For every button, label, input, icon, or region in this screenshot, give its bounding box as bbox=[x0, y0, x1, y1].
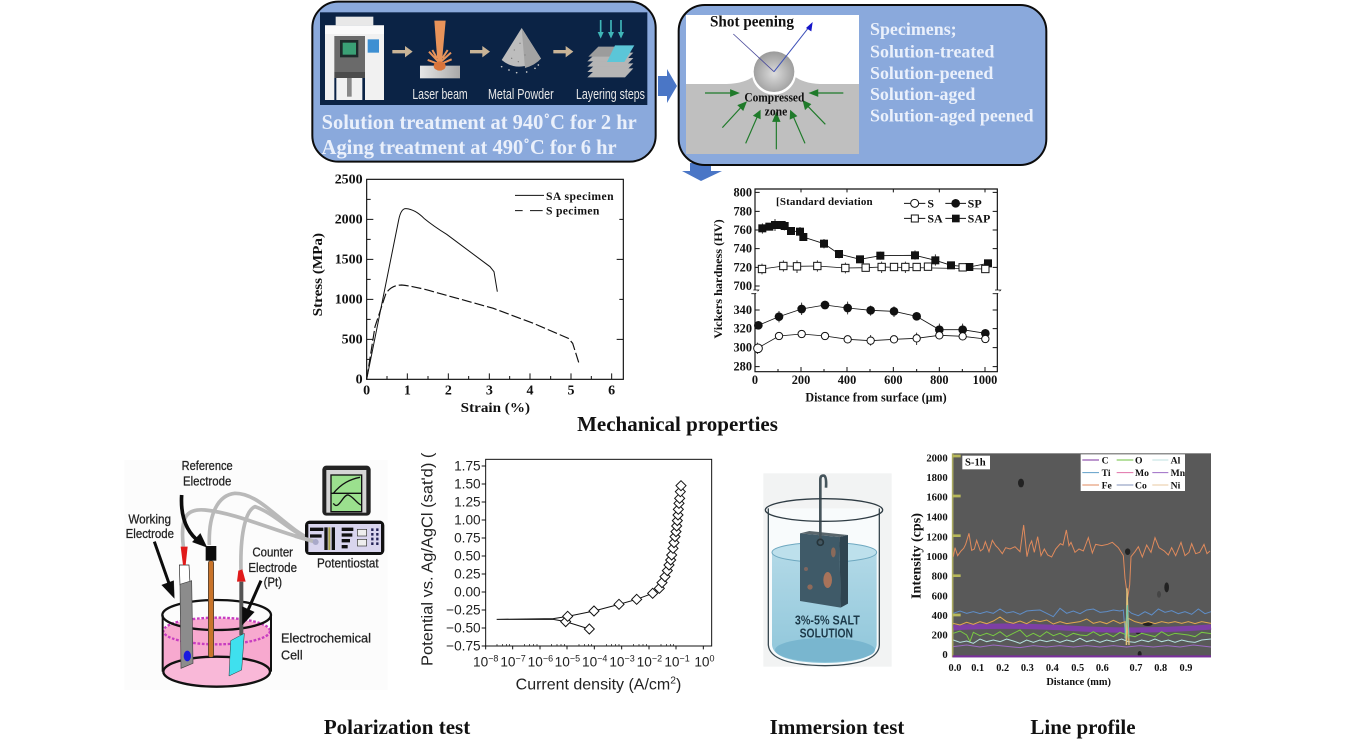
polarization data bbox=[497, 481, 686, 634]
y tick labels: −0.25 bbox=[446, 602, 481, 617]
x tick labels: −3 bbox=[625, 653, 635, 663]
label: metal powder: Metal Powder bbox=[488, 87, 554, 103]
x tick labels: −1 bbox=[680, 653, 690, 663]
arrow: peening to mechanical properties bbox=[682, 163, 722, 181]
y tick labels: −0.50 bbox=[446, 620, 481, 635]
x tick labels: −4 bbox=[597, 653, 607, 663]
x tick labels: 0.2 bbox=[996, 663, 1009, 674]
axis tick labels: 2 bbox=[445, 384, 452, 399]
text: aging treatment: Aging treatment at 490˚C for 6 hr bbox=[322, 137, 617, 159]
axis tick labels: 500 bbox=[342, 332, 363, 347]
y tick labels: 1800 bbox=[926, 473, 948, 484]
labels: Electrode bbox=[183, 473, 231, 488]
y tick labels: 0.25 bbox=[454, 566, 481, 581]
x tick labels: 0.9 bbox=[1180, 663, 1192, 674]
y tick labels: 0.00 bbox=[454, 584, 481, 599]
x tick labels: 10 bbox=[694, 654, 710, 669]
legend: S pecimen bbox=[546, 205, 600, 218]
note: standard deviation: [Standard deviation bbox=[776, 196, 873, 208]
trace: C baseline bbox=[953, 653, 1211, 659]
y tick labels bbox=[926, 453, 948, 661]
text: specimen list: Solution-peened bbox=[870, 63, 993, 83]
axis tick labels: 300 bbox=[733, 341, 752, 355]
pointer arrows bbox=[154, 495, 261, 625]
heading: immersion test: Immersion test bbox=[770, 715, 904, 739]
legend: Fe bbox=[1102, 480, 1113, 491]
text: specimen list: Solution-treated bbox=[870, 41, 994, 61]
icon: process arrows bbox=[392, 46, 573, 57]
label: salt solution: SOLUTION bbox=[800, 627, 853, 641]
legend: SAP bbox=[968, 211, 990, 225]
labels: Electrode bbox=[248, 560, 297, 575]
axis tick labels: 1 bbox=[404, 384, 411, 399]
axis title: hardness: Vickers hardness (HV) bbox=[711, 219, 725, 339]
labels: Counter bbox=[252, 545, 293, 560]
text: specimen list: Solution-aged bbox=[870, 84, 975, 104]
reference electrode bbox=[206, 546, 216, 657]
y tick labels: 1.00 bbox=[454, 512, 481, 527]
text: specimen list: Specimens; bbox=[870, 19, 957, 39]
working electrode bbox=[179, 547, 193, 668]
x tick labels bbox=[473, 653, 715, 669]
axis tick labels: 800 bbox=[930, 373, 949, 387]
x tick labels: 10 bbox=[555, 654, 570, 669]
x tick labels: 10 bbox=[582, 654, 597, 669]
diagram: electrochemical cell bbox=[124, 458, 388, 690]
legend bbox=[904, 196, 990, 225]
axis tick labels: 720 bbox=[733, 260, 752, 274]
axis tick labels bbox=[335, 172, 615, 399]
y tick labels: 1.25 bbox=[454, 494, 481, 509]
legend: Ni bbox=[1171, 480, 1181, 491]
chart: polarization curve bbox=[419, 452, 715, 693]
heading: mechanical properties: Mechanical properties bbox=[577, 412, 778, 436]
labels: Cell bbox=[281, 647, 303, 662]
arrow: process to peening bbox=[658, 69, 677, 103]
legend: SA bbox=[927, 211, 943, 225]
axis tick labels: 1500 bbox=[335, 252, 363, 267]
axis tick labels: 280 bbox=[733, 360, 752, 374]
trace: Fe bbox=[953, 525, 1210, 598]
x tick labels: 0.3 bbox=[1021, 663, 1034, 674]
axis tick labels: 6 bbox=[608, 384, 615, 399]
y axis overlay bbox=[950, 453, 955, 657]
x tick labels: 0.5 bbox=[1071, 663, 1084, 674]
chart: line profile bbox=[909, 453, 1211, 688]
x tick labels: 0.8 bbox=[1154, 663, 1167, 674]
beaker rim bbox=[765, 499, 883, 521]
axis tick labels: 1000 bbox=[335, 292, 363, 307]
labels: Electrode bbox=[126, 526, 174, 541]
heading: shot peening: Shot peening bbox=[710, 14, 794, 31]
series: S bbox=[754, 330, 989, 354]
axis tick labels bbox=[733, 185, 997, 387]
legend: O bbox=[1135, 455, 1143, 466]
x tick labels: −7 bbox=[516, 653, 526, 663]
y tick labels: 1400 bbox=[926, 513, 948, 524]
y tick labels: 1000 bbox=[926, 552, 948, 563]
y tick labels: 800 bbox=[932, 572, 948, 583]
diagram: shot peening: zone bbox=[765, 105, 788, 119]
axis title: potential: Potential vs. Ag/AgCl (sat'd) ( bbox=[419, 452, 436, 666]
micrograph specks bbox=[1018, 479, 1169, 657]
axis title: distance: Distance (mm) bbox=[1046, 676, 1111, 688]
axis tick labels: 2000 bbox=[335, 212, 363, 227]
diagram: immersion beaker bbox=[763, 473, 892, 667]
metal specimen bbox=[800, 531, 848, 608]
axis title: current density: Current density (A/cm bbox=[516, 676, 670, 693]
y tick labels: 0.75 bbox=[454, 530, 481, 545]
label: layering steps: Layering steps bbox=[576, 87, 645, 103]
counter electrode bbox=[229, 569, 246, 676]
icon: layering steps bbox=[587, 20, 634, 77]
axis tick labels: 3 bbox=[486, 384, 493, 399]
panel: additive manufacturing and heat treatment bbox=[312, 2, 656, 162]
y tick labels: 0 bbox=[942, 650, 948, 661]
axis tick labels: 0 bbox=[752, 373, 758, 387]
text: specimen list bbox=[870, 19, 1034, 126]
trace: Mn band bbox=[953, 626, 1211, 630]
y tick labels: 200 bbox=[932, 631, 948, 642]
x tick labels: 0.6 bbox=[1096, 663, 1109, 674]
series: SA bbox=[758, 260, 989, 274]
axis title: distance: Distance from surface (μm) bbox=[805, 391, 947, 405]
wires bbox=[183, 493, 315, 570]
axis tick labels: 200 bbox=[792, 373, 810, 387]
series: SP bbox=[754, 301, 990, 338]
curve: S specimen bbox=[367, 285, 579, 379]
sample tag bbox=[962, 456, 990, 469]
legend: Ti bbox=[1102, 468, 1111, 479]
diagram: shot peening bbox=[686, 14, 859, 154]
labels: Potentiostat bbox=[317, 555, 379, 570]
image: manufacturing process strip bbox=[320, 12, 647, 105]
series: SAP bbox=[758, 219, 992, 271]
axis tick labels: 800 bbox=[733, 185, 752, 199]
heading: polarization test: Polarization test bbox=[324, 715, 470, 739]
axis title: intensity: Intensity (cps) bbox=[909, 513, 924, 599]
x tick labels: −2 bbox=[652, 653, 662, 663]
axis tick labels: 760 bbox=[733, 223, 752, 237]
axis tick labels: 600 bbox=[884, 373, 903, 387]
labels: Reference bbox=[182, 458, 233, 473]
axis tick labels: 340 bbox=[733, 303, 752, 317]
legend: C bbox=[1102, 455, 1109, 466]
axis title: current density: 2 bbox=[670, 676, 676, 687]
axis title: strain: Strain (%) bbox=[461, 401, 530, 416]
axis tick labels: 0 bbox=[356, 372, 363, 387]
hook bbox=[820, 476, 826, 543]
text: solution treatment: Solution treatment at 940˚C for 2 hr bbox=[322, 112, 637, 134]
x tick labels: 0.4 bbox=[1046, 663, 1059, 674]
icon: metal powder cone bbox=[501, 28, 541, 73]
trace: Ti bbox=[953, 608, 1211, 640]
y tick labels: 0.50 bbox=[454, 548, 481, 563]
labels bbox=[126, 458, 379, 662]
legend: Co bbox=[1135, 480, 1147, 491]
x tick labels: 10 bbox=[500, 654, 516, 669]
y tick labels: 600 bbox=[932, 591, 948, 602]
labels: (Pt) bbox=[264, 575, 282, 590]
legend: SA specimen bbox=[546, 190, 614, 203]
icon: 3D printer machine bbox=[325, 17, 384, 100]
chart: line profile: S-1h bbox=[965, 458, 986, 469]
legend bbox=[515, 190, 614, 218]
legend: Al bbox=[1171, 455, 1181, 466]
label: laser beam: Laser beam bbox=[412, 87, 468, 103]
axis tick labels: 320 bbox=[733, 322, 752, 336]
x tick labels: −8 bbox=[488, 653, 498, 663]
trace: O green bbox=[953, 630, 1211, 642]
x tick labels: 0.1 bbox=[971, 663, 984, 674]
x tick labels: −6 bbox=[543, 653, 553, 663]
x tick labels bbox=[949, 663, 1192, 674]
x tick labels: 0.0 bbox=[949, 663, 961, 674]
legend: S bbox=[927, 196, 934, 210]
axis tick labels: 1000 bbox=[973, 373, 997, 387]
x tick labels: 10 bbox=[528, 654, 543, 669]
axis tick labels: 780 bbox=[733, 204, 752, 218]
y tick labels: 400 bbox=[932, 611, 948, 622]
beaker body bbox=[768, 508, 879, 666]
label: compressed zone: Compressed bbox=[744, 90, 804, 104]
panel: shot peening and specimens bbox=[679, 5, 1046, 165]
icon: laser beam bbox=[420, 21, 460, 78]
chart: stress-strain curves bbox=[311, 172, 623, 416]
salt water bbox=[772, 542, 877, 663]
axis title: stress: Stress (MPa) bbox=[311, 233, 326, 316]
y tick labels: 1.50 bbox=[454, 476, 481, 491]
label: salt solution: 3%-5% SALT bbox=[795, 613, 860, 627]
axis tick labels: 5 bbox=[567, 384, 574, 399]
spike overlays bbox=[1126, 588, 1129, 645]
text: specimen list: Solution-aged peened bbox=[870, 106, 1034, 126]
x tick labels: 0 bbox=[710, 653, 715, 663]
y tick labels: 2000 bbox=[926, 453, 948, 464]
y tick labels: 1200 bbox=[926, 532, 948, 543]
trace: Co purple bbox=[953, 645, 1211, 648]
y tick labels: 1.75 bbox=[454, 458, 481, 473]
axis tick labels: 700 bbox=[733, 279, 752, 293]
y tick labels: 1600 bbox=[926, 493, 948, 504]
axis tick labels: 4 bbox=[526, 384, 533, 399]
axis title: current density: ) bbox=[676, 676, 681, 693]
legend bbox=[1081, 454, 1186, 491]
y tick labels: −0.75 bbox=[446, 638, 481, 653]
x tick labels: 10 bbox=[609, 654, 625, 669]
labels: Electrochemical bbox=[281, 631, 371, 646]
x tick labels: 10 bbox=[473, 654, 488, 669]
trace: Al pale bbox=[953, 638, 1211, 643]
potentiostat bbox=[295, 466, 384, 555]
trace: Ni orange bbox=[953, 617, 1211, 645]
legend: Mn bbox=[1171, 468, 1186, 479]
curve: SA specimen bbox=[367, 209, 497, 379]
arrows: compressive stress bbox=[705, 90, 843, 149]
axis tick labels: 0 bbox=[363, 384, 370, 399]
chart: Vickers hardness profile bbox=[711, 185, 1001, 405]
axis tick labels: 2500 bbox=[335, 172, 363, 187]
label: salt solution bbox=[795, 613, 860, 641]
axis tick labels: 740 bbox=[733, 242, 752, 256]
legend: SP bbox=[968, 196, 982, 210]
y tick labels bbox=[446, 458, 481, 653]
x tick labels: −5 bbox=[570, 653, 580, 663]
beaker bbox=[162, 600, 271, 687]
x tick labels: 0.7 bbox=[1130, 663, 1142, 674]
heading: line profile: Line profile bbox=[1030, 715, 1136, 739]
x tick labels: 10 bbox=[637, 654, 652, 669]
x tick labels: 10 bbox=[664, 654, 680, 669]
axis tick labels: 400 bbox=[838, 373, 856, 387]
legend: Mo bbox=[1135, 468, 1149, 479]
labels: Working bbox=[128, 511, 171, 526]
